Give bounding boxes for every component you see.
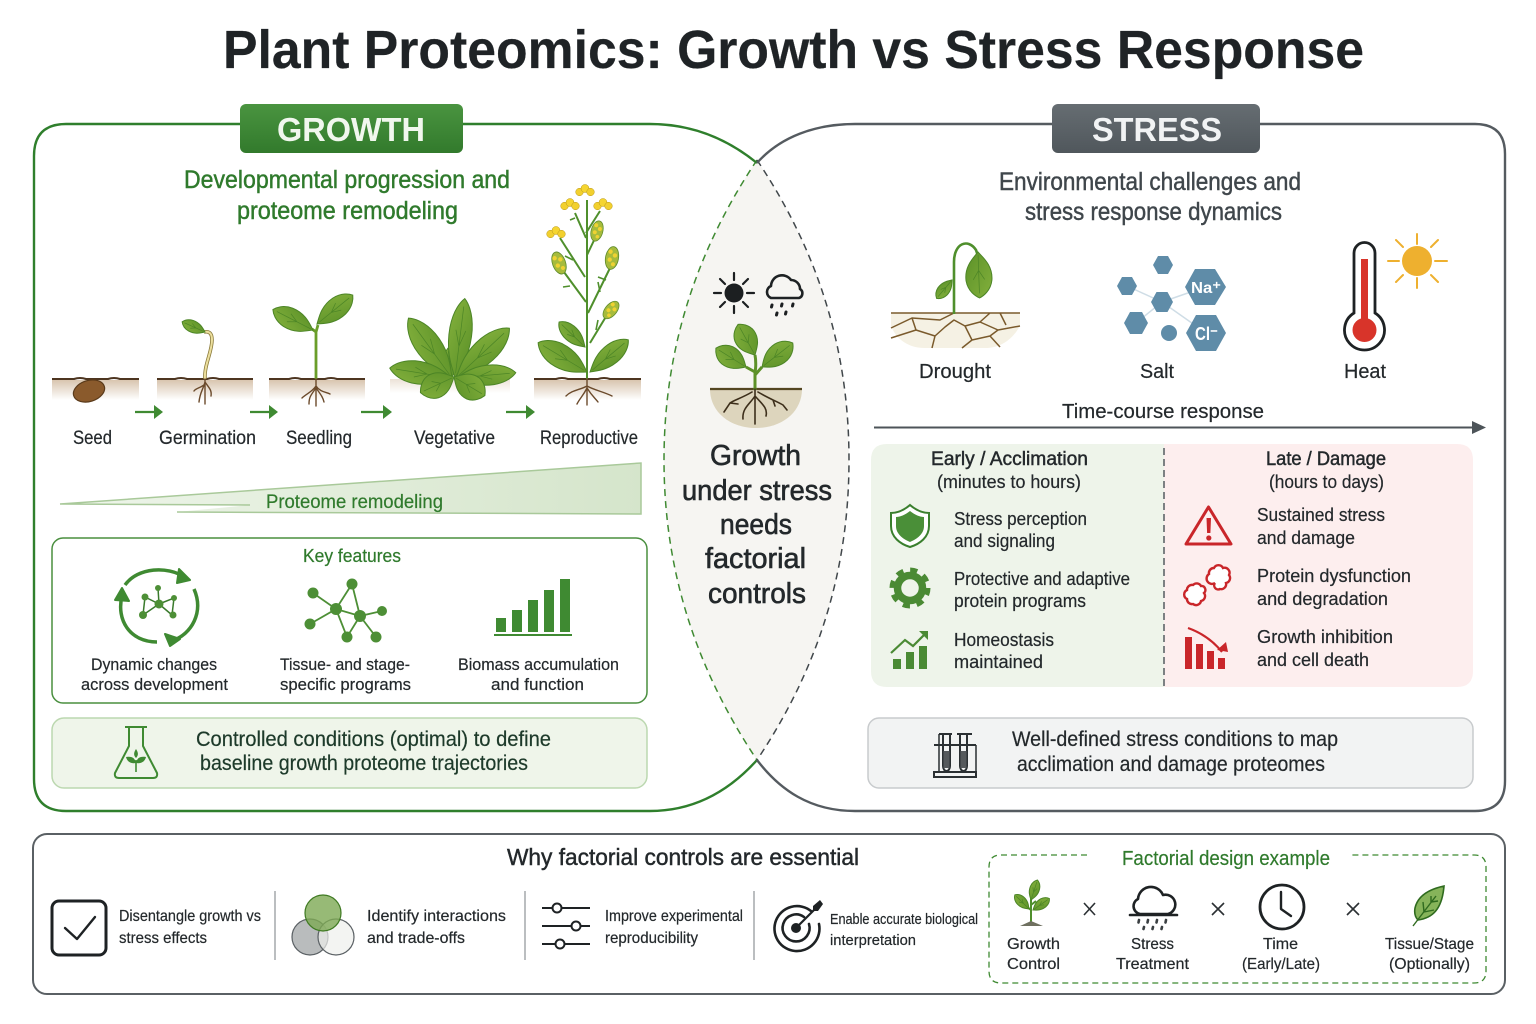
item text [954, 569, 1130, 611]
hazard label: Drought [919, 361, 991, 383]
center message: controls [708, 578, 806, 610]
factor: tissue: Tissue/Stage [1385, 936, 1474, 953]
icon: salt ions: Na⁺ [1191, 280, 1221, 297]
feature text [280, 655, 411, 694]
early heading [931, 449, 1088, 492]
factor: stress treatment [1116, 887, 1190, 973]
callout: controlled conditions: baseline growth proteome trajectories [200, 752, 528, 775]
hazard label: Salt [1140, 361, 1174, 383]
item text [954, 630, 1054, 672]
panel: key features [52, 538, 647, 703]
item text: and degradation [1257, 589, 1388, 609]
callout: stress conditions: Well-defined stress conditions to map [1012, 728, 1338, 751]
item text [954, 509, 1087, 551]
reason: interactions [292, 895, 506, 955]
item text: and damage [1257, 528, 1355, 548]
stage: vegetative [388, 297, 518, 449]
panel: stress [757, 104, 1505, 811]
reason: reproducibility: reproducibility [605, 930, 698, 947]
callout: controlled conditions: Controlled conditions (optimal) to define [196, 728, 551, 751]
item text: protein programs [954, 591, 1086, 611]
arrow [250, 405, 278, 419]
late heading [1266, 449, 1386, 492]
icon: test tubes [934, 734, 976, 777]
item text [1257, 505, 1385, 548]
growth tab: GROWTH [277, 111, 425, 148]
hazard label: Heat [1344, 361, 1386, 383]
icon: salt ions: Cl⁻ [1195, 324, 1218, 344]
item text: Growth inhibition [1257, 627, 1393, 647]
icon: flask [115, 727, 157, 778]
icon: shield [891, 505, 929, 547]
feature text: Biomass accumulation [458, 655, 619, 674]
item text: Protein dysfunction [1257, 566, 1411, 586]
panel: why factorial controls [33, 834, 1505, 994]
stage label: Germination [159, 428, 256, 449]
item text [1257, 627, 1393, 670]
icon: warning triangle [1186, 507, 1231, 544]
item text: Stress perception [954, 509, 1087, 529]
feature text: and function [491, 675, 584, 694]
factor: growth control [1007, 879, 1060, 973]
title: Plant Proteomics: Growth vs Stress Response [223, 20, 1364, 80]
icon: thermometer and sun [1344, 234, 1447, 383]
center message: Growth [710, 440, 801, 472]
factor: time [1242, 885, 1320, 973]
bottom heading: Why factorial controls are essential [507, 844, 859, 870]
stress tab: STRESS [1092, 111, 1222, 148]
callout: stress conditions [868, 718, 1473, 788]
item text: Homeostasis [954, 630, 1054, 650]
panel: growth [34, 104, 757, 811]
late heading: (hours to days) [1269, 472, 1384, 492]
early heading: (minutes to hours) [937, 472, 1081, 492]
growth subheading: Developmental progression and [184, 166, 510, 194]
reason: disentangle: stress effects [119, 930, 207, 947]
icon: gear [892, 570, 928, 606]
factor: tissue: (Optionally) [1389, 956, 1470, 973]
callout: stress conditions: acclimation and damage proteomes [1017, 753, 1325, 776]
multiply sign [1212, 903, 1224, 915]
item text: and cell death [1257, 650, 1369, 670]
icon: sun [714, 273, 754, 313]
factor: stress treatment: Stress [1131, 936, 1174, 953]
feature text [458, 655, 619, 694]
growth subheading: proteome remodeling [237, 197, 458, 225]
growth tab [240, 104, 463, 153]
late heading: Late / Damage [1266, 449, 1386, 470]
stage label: Seedling [286, 428, 352, 449]
stage: seedling [268, 287, 365, 449]
reason: reproducibility [542, 904, 743, 948]
item text: maintained [954, 652, 1043, 672]
reason: interpretation [774, 900, 978, 951]
time-course arrow [874, 401, 1486, 434]
arrow [506, 405, 535, 419]
feature text: across development [81, 675, 228, 694]
factorial design example [989, 848, 1486, 983]
factor: growth control: Growth [1007, 936, 1060, 953]
proteome remodeling wedge [60, 463, 641, 514]
panel: late damage [1164, 444, 1473, 687]
icon: homeostasis chart [891, 631, 928, 669]
proteome remodeling wedge: Proteome remodeling [266, 492, 443, 513]
icon: dynamic cycle [115, 569, 198, 646]
stress subheading [999, 168, 1301, 226]
multiply sign [1347, 903, 1359, 915]
icon: protein network [304, 578, 387, 642]
reason: reproducibility: Improve experimental [605, 908, 743, 925]
stage label: Seed [73, 428, 112, 449]
stress tab [1052, 104, 1260, 153]
item text: and signaling [954, 531, 1055, 551]
stage label: Reproductive [540, 428, 638, 449]
factor: stress treatment: Treatment [1116, 956, 1190, 973]
time-course arrow: Time-course response [1062, 401, 1264, 423]
icon: damaged proteins [1184, 565, 1230, 605]
icon: salt ions [1117, 256, 1226, 383]
arrow [361, 405, 392, 419]
reason: interactions: and trade-offs [367, 930, 465, 947]
feature text [81, 655, 228, 694]
stage: germination [157, 316, 256, 449]
stress subheading: stress response dynamics [1025, 198, 1282, 226]
factor: growth control: Control [1007, 956, 1060, 973]
multiply sign [1084, 903, 1095, 915]
factorial design example: Factorial design example [1122, 848, 1330, 870]
icon: rising bars [494, 579, 572, 635]
growth subheading [184, 166, 510, 225]
key features heading: Key features [303, 546, 401, 566]
early heading: Early / Acclimation [931, 449, 1088, 470]
reason: disentangle: Disentangle growth vs [119, 908, 261, 925]
feature text: Tissue- and stage- [280, 655, 410, 674]
center message: factorial [705, 543, 806, 575]
stage: reproductive [532, 184, 641, 449]
center message: needs [720, 509, 792, 541]
icon: falling bars [1185, 628, 1228, 669]
icon: plant with roots [710, 319, 802, 428]
feature text: specific programs [280, 675, 411, 694]
item text: Sustained stress [1257, 505, 1385, 525]
panel: early acclimation [871, 444, 1164, 687]
stress subheading: Environmental challenges and [999, 168, 1301, 196]
panel: center overlap [664, 160, 849, 760]
reason: interactions: Identify interactions [367, 908, 506, 925]
factor: time: Time [1263, 936, 1298, 953]
factor: tissue [1385, 886, 1474, 973]
reason: interpretation: interpretation [830, 932, 916, 949]
feature text: Dynamic changes [91, 655, 217, 674]
item text: Protective and adaptive [954, 569, 1130, 589]
item text [1257, 566, 1411, 609]
reason: interpretation: Enable accurate biological [830, 911, 978, 928]
arrow [135, 405, 163, 419]
center message [682, 440, 832, 610]
center message: under stress [682, 475, 832, 507]
stage: seed [52, 376, 139, 449]
callout: controlled conditions [52, 718, 647, 788]
icon: rain cloud [767, 275, 802, 315]
icon: drought [891, 244, 1020, 383]
reason: disentangle [52, 901, 261, 955]
stage label: Vegetative [414, 428, 495, 449]
factor: time: (Early/Late) [1242, 956, 1320, 973]
